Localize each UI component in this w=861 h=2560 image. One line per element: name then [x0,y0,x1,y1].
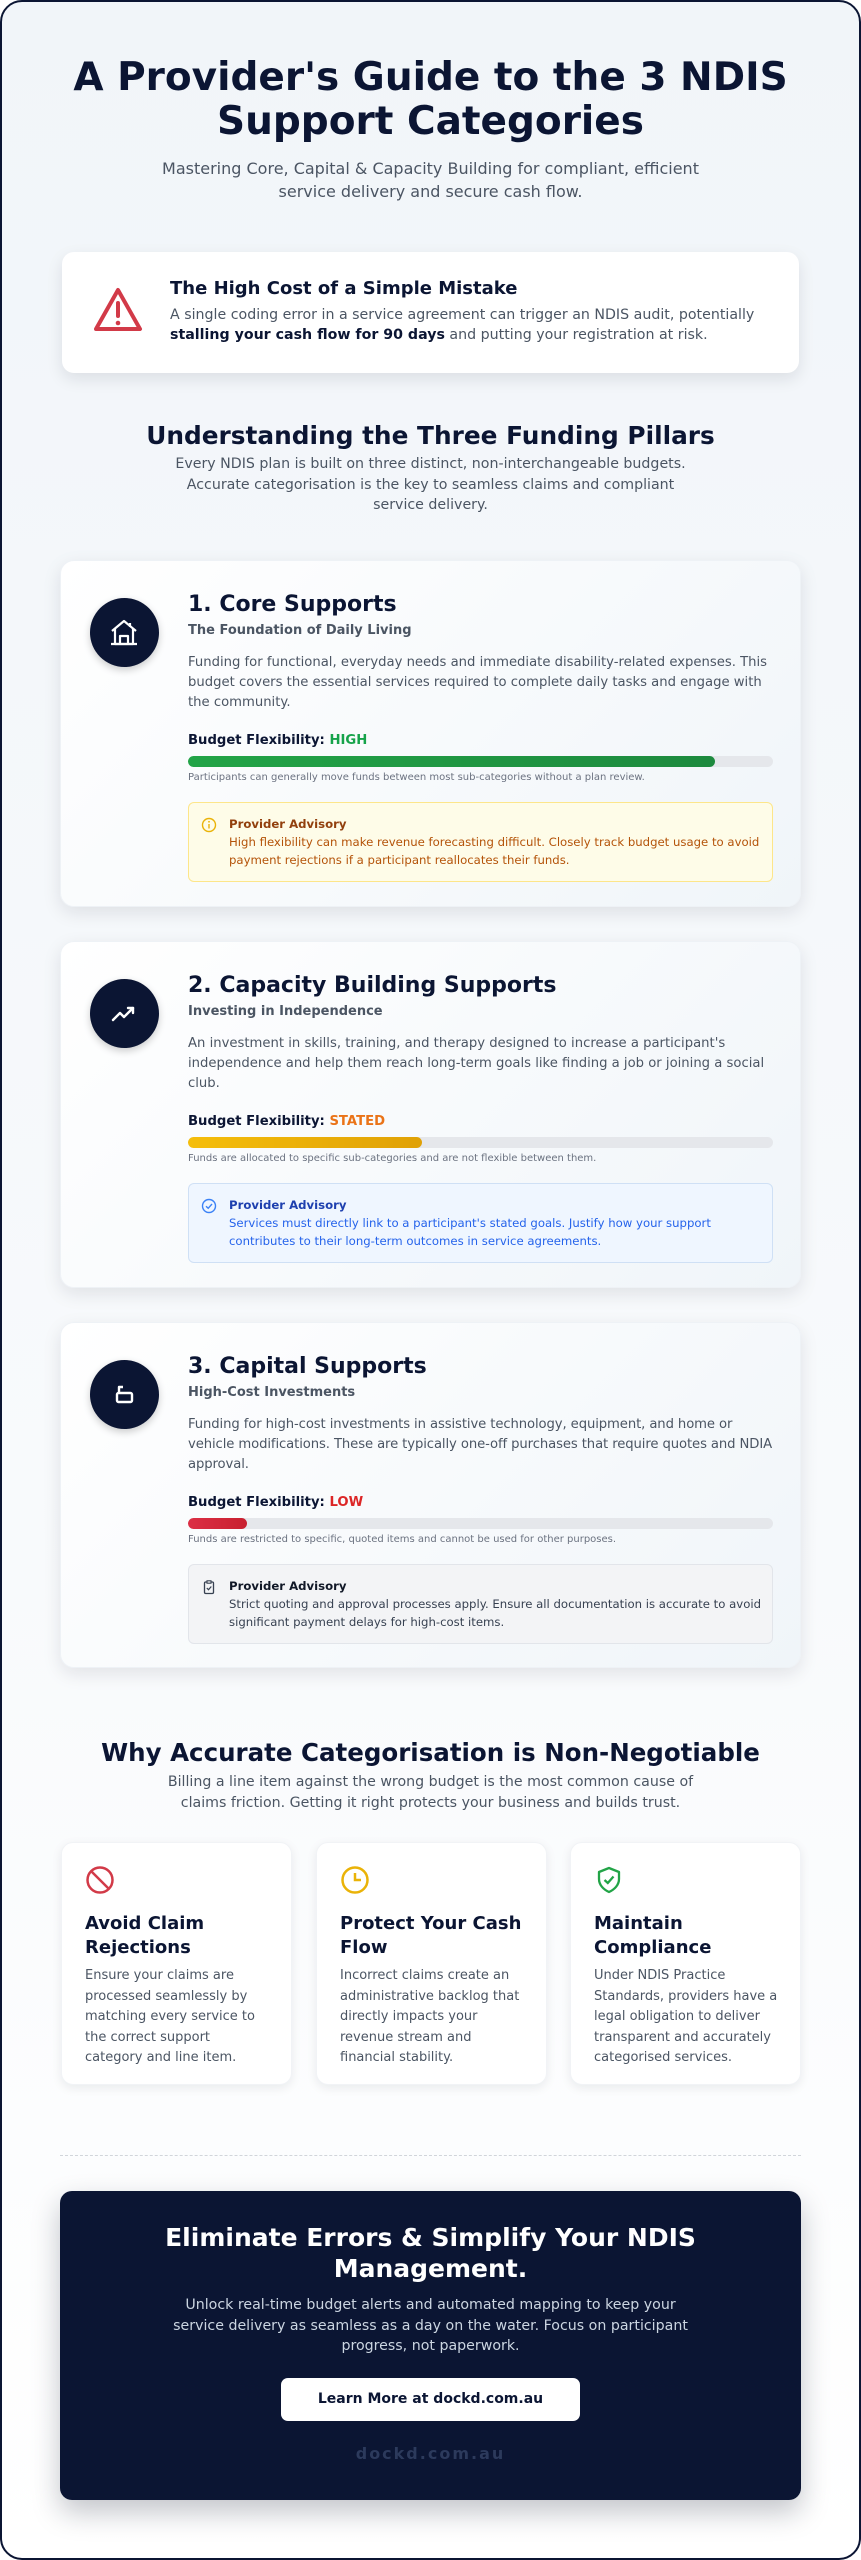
advisory: capacity [188,1183,773,1263]
panel: avoid claim rejections: Avoid Claim Rejections [85,1913,204,1958]
text: pillars intro: Every NDIS plan is built on three distinct, non-interchangeable budgets. Accurate categorisation is the key to seamless claims and compliant service delivery. [175,456,686,513]
icon: equipment [90,1360,159,1429]
title: A Provider's Guide to the 3 NDIS [73,55,788,100]
heading: funding pillars: Understanding the Three Funding Pillars [146,421,715,450]
advisory: capacity: Provider Advisory [229,1198,347,1212]
icon: warning triangle [94,288,142,331]
panel: capacity building: Funds are allocated to specific sub-categories and are not flexible between them. [188,1153,596,1164]
panel: avoid claim rejections: Ensure your claims are processed seamlessly by matching every service to the correct support category and line item. [85,1968,255,2065]
panel: core supports: 1. Core Supports [188,592,397,617]
panel: call to action [60,2191,801,2500]
advisory: core [188,802,773,882]
icon: home [90,598,159,667]
panel: core supports: Funding for functional, everyday needs and immediate disability-related expenses. This budget covers the essential services required to complete daily tasks and engage with the community. [188,655,767,710]
panel: protect cash flow [316,1842,547,2085]
bar: stated [188,1137,773,1148]
cta heading: Management. [334,2254,527,2283]
button [281,2378,580,2421]
icon: shield check [598,1866,620,1894]
callout: high cost of mistake [62,252,799,373]
advisory: core: Provider Advisory [229,817,347,831]
panel: capacity building: An investment in skills, training, and therapy designed to increase a participant's independence and help them reach long-term goals like finding a job or joining a social club. [188,1036,764,1091]
panel: capital supports [60,1322,801,1668]
button: Learn More at dockd.com.au [318,2391,543,2407]
cta text: Unlock real-time budget alerts and automated mapping to keep your service delivery as seamless as a day on the water. Focus on participant progress, not paperwork. [173,2297,688,2354]
advisory: core: High flexibility can make revenue forecasting difficult. Closely track budget usage to avoid payment rejections if a participant reallocates their funds. [229,835,759,867]
icon: trend up [90,979,159,1048]
panel: capital supports: 3. Capital Supports [188,1354,427,1379]
panel: maintain compliance: Under NDIS Practice Standards, providers have a legal obligation to deliver transparent and accurately categorised services. [594,1968,777,2065]
panel: core supports: Participants can generally move funds between most sub-categories without a plan review. [188,772,645,783]
panel: capacity building: Investing in Independence [188,1004,383,1019]
title [73,55,788,144]
panel: core supports: The Foundation of Daily Living [188,623,412,638]
bar: high [188,756,773,767]
panel: maintain compliance [570,1842,801,2085]
panel: protect cash flow: Protect Your Cash Flow [340,1913,521,1958]
panel: capital supports: Budget Flexibility: LOW [188,1495,363,1510]
panel: capacity building: Budget Flexibility: STATED [188,1114,385,1129]
cta heading [165,2223,696,2283]
icon: clock [341,1866,369,1894]
advisory: capital: Provider Advisory [229,1579,347,1593]
panel: core supports [60,560,801,907]
cta heading: Eliminate Errors & Simplify Your NDIS [165,2223,696,2252]
advisory: capital: Strict quoting and approval processes apply. Ensure all documentation is accurate to avoid significant payment delays for high-cost items. [229,1597,761,1629]
icon: prohibited [86,1866,114,1894]
panel: capital supports: Funds are restricted to specific, quoted items and cannot be used for other purposes. [188,1534,616,1545]
panel: maintain compliance: Maintain Compliance [594,1913,711,1958]
callout text: The High Cost of a Simple Mistake [170,278,517,299]
callout text [170,278,754,343]
panel: capacity building: 2. Capacity Building Supports [188,973,556,998]
subtitle: Mastering Core, Capital & Capacity Building for compliant, efficient service delivery and secure cash flow. [162,159,699,201]
advisory: capital [188,1564,773,1644]
advisory: capacity: Services must directly link to a participant's stated goals. Justify how your support contributes to their long-term outcomes in service agreements. [229,1216,711,1248]
panel: capital supports: High-Cost Investments [188,1385,355,1400]
panel: capital supports: Funding for high-cost investments in assistive technology, equipment, and home or vehicle modifications. These are typically one-off purchases that require quotes and NDIA approval. [188,1417,772,1472]
panel: avoid claim rejections [61,1842,292,2085]
footer brand: dockd.com.au [356,2444,505,2463]
panel: protect cash flow: Incorrect claims create an administrative backlog that directly impacts your revenue stream and financial stability. [340,1968,519,2065]
panel: capacity building [60,941,801,1288]
panel: core supports: Budget Flexibility: HIGH [188,733,367,748]
title: Support Categories [217,99,644,144]
bar: low [188,1518,773,1529]
callout text: A single coding error in a service agreement can trigger an NDIS audit, potentially stalling your cash flow for 90 days and putting your registration at risk. [170,307,754,343]
text: why intro: Billing a line item against the wrong budget is the most common cause of claims friction. Getting it right protects your business and builds trust. [168,1774,693,1811]
heading: why accurate: Why Accurate Categorisation is Non-Negotiable [101,1738,760,1767]
